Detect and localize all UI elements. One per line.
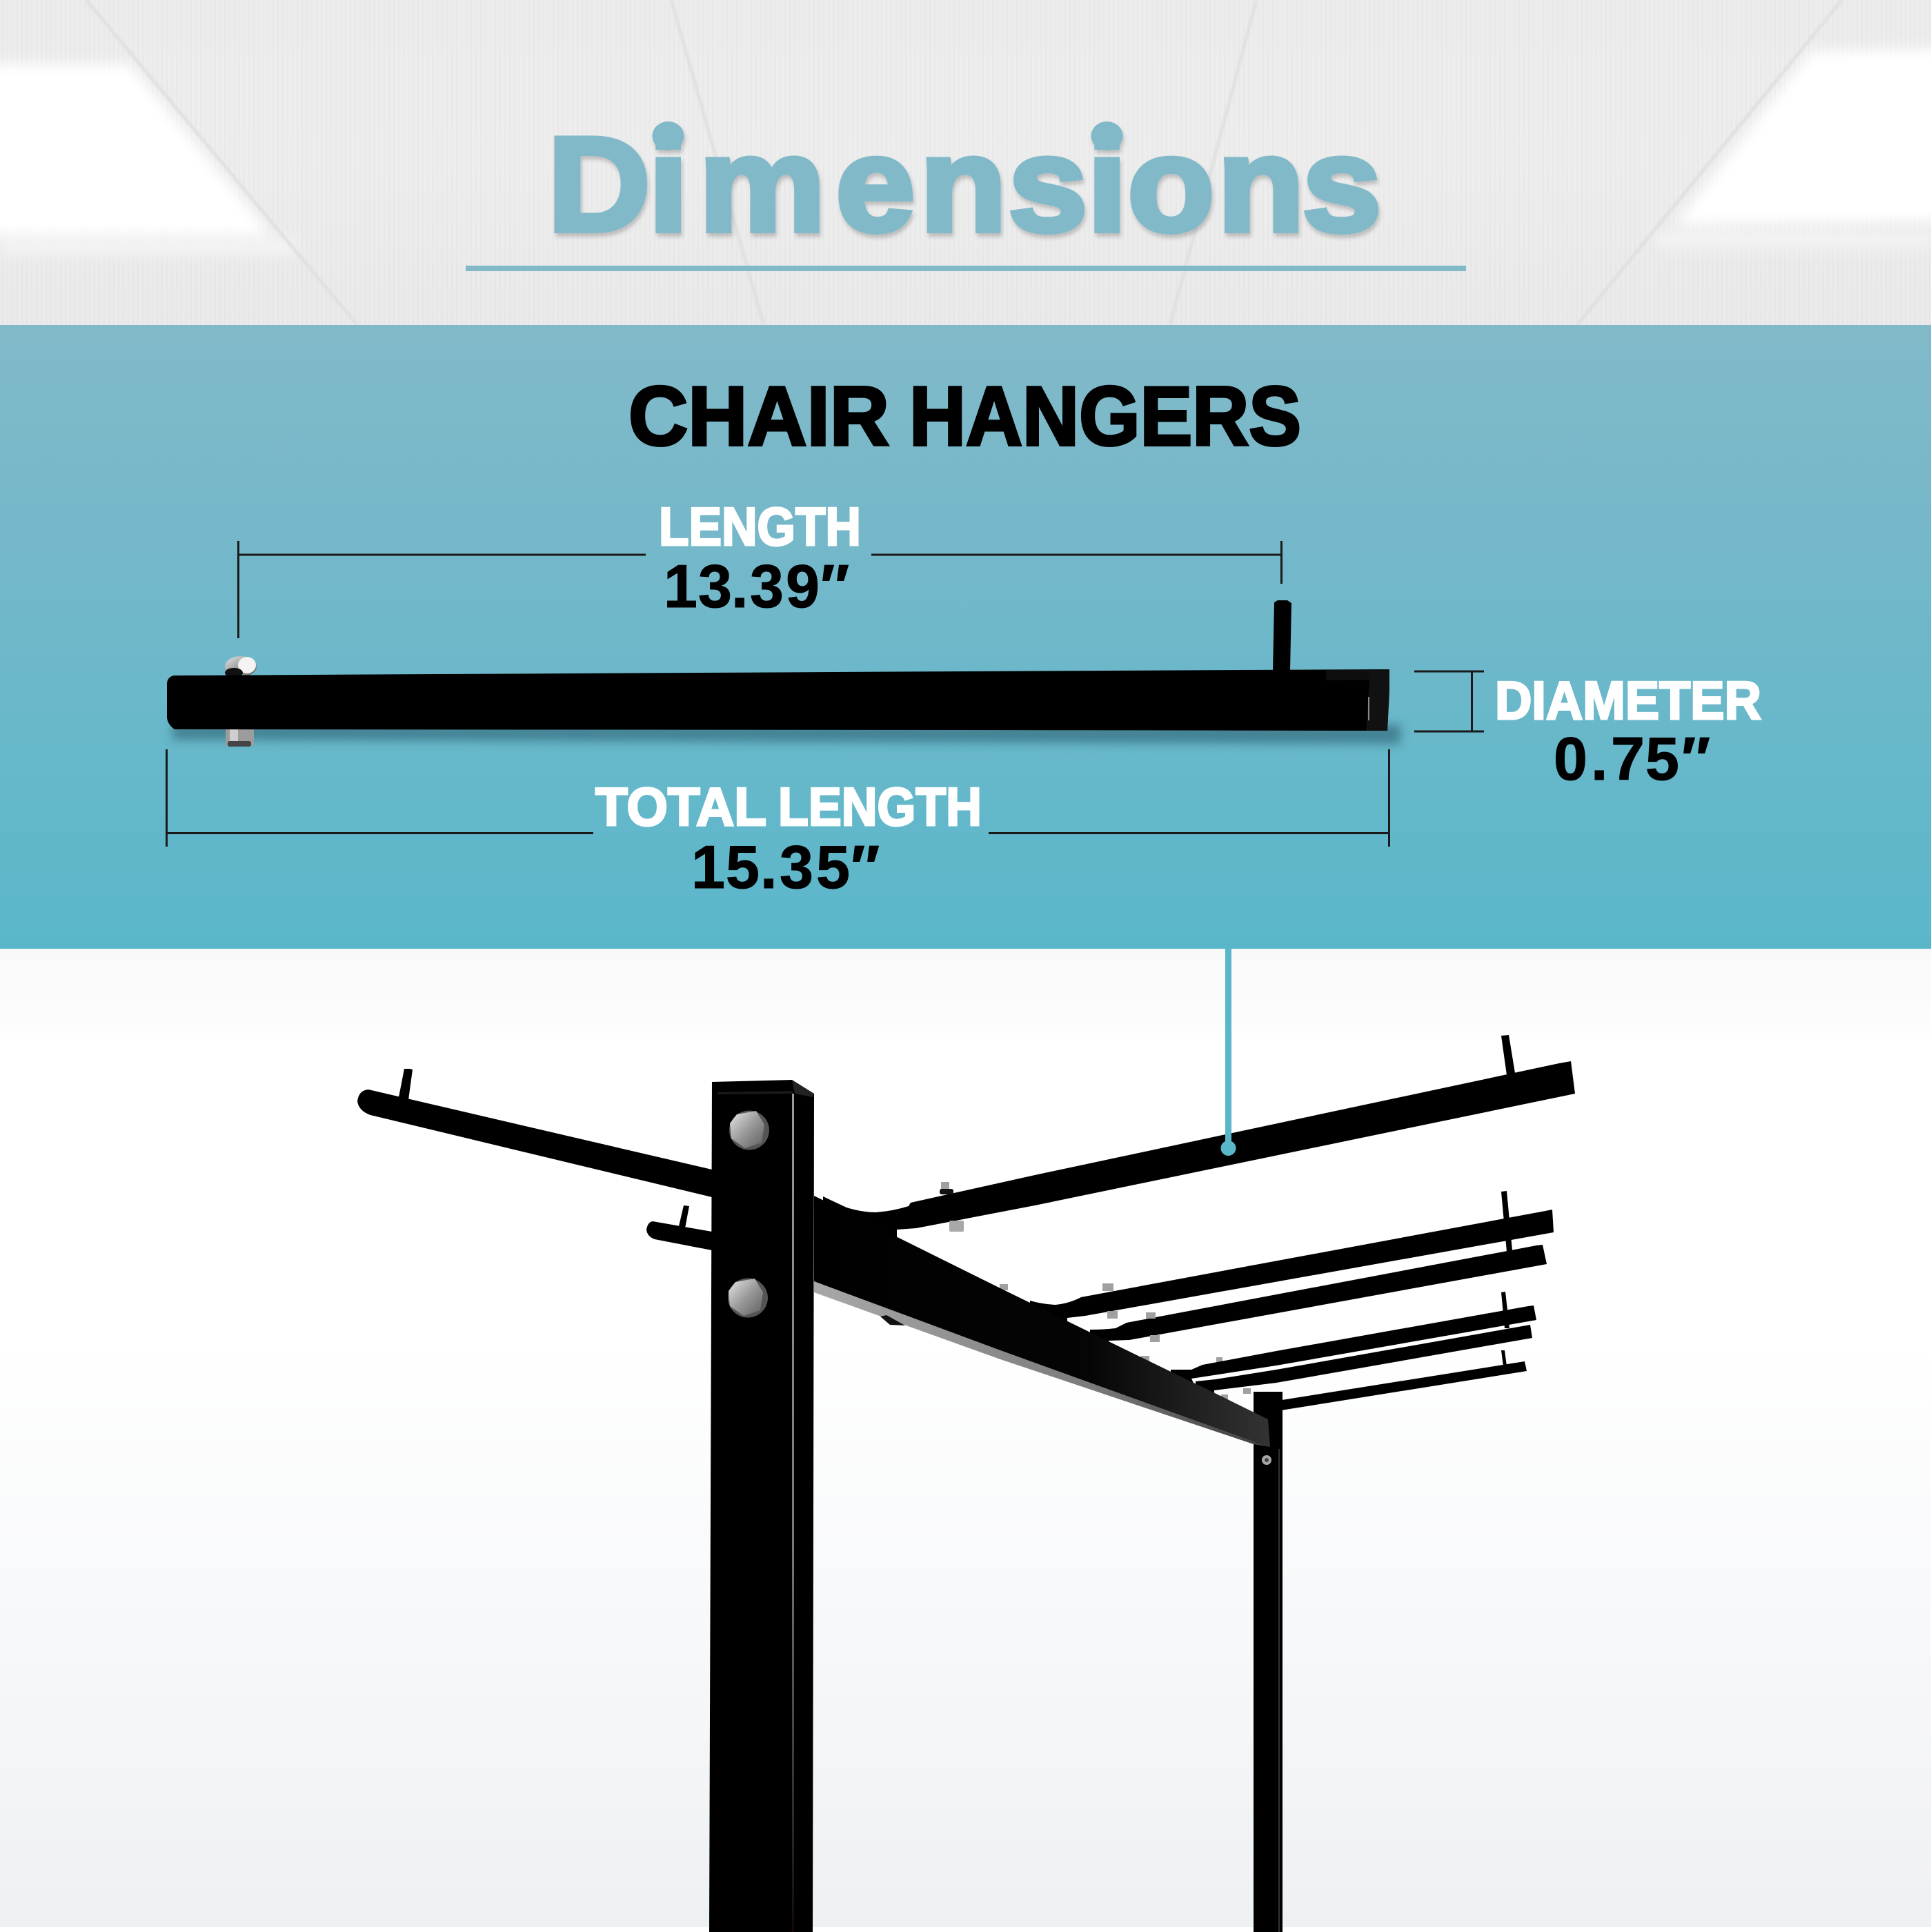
right post (1254, 1392, 1283, 1932)
diameter bracket (1414, 671, 1484, 733)
callout connector line with dot (1221, 949, 1236, 1156)
background: ceiling photo (0, 0, 1931, 325)
pair bolts (1000, 1283, 1251, 1399)
title underline (466, 266, 1466, 271)
top right hanger, callout target (823, 1035, 1575, 1242)
diagonal beam (814, 1196, 1270, 1447)
hanger bolts (940, 1182, 964, 1232)
main post (709, 1080, 814, 1932)
background: lower white floor gradient (0, 949, 1931, 1927)
title: Dimensions: Dimensions (548, 110, 1381, 259)
panel heading: CHAIR HANGERS (628, 369, 1301, 463)
label: LENGTH: LENGTH (659, 496, 861, 557)
panel: chair hangers band (0, 325, 1931, 949)
tube bolt top (225, 656, 257, 678)
chair hanger tube photo (167, 600, 1400, 747)
length dimension line (237, 541, 1283, 638)
third right hanger group (1171, 1292, 1536, 1413)
left arm, short (646, 1205, 712, 1250)
second right hanger pair (1000, 1191, 1554, 1399)
value: 13.39 inches: 13.39″ (664, 552, 849, 620)
label: TOTAL LENGTH (595, 776, 982, 837)
value: 15.35 inches: 15.35″ (691, 833, 880, 901)
label: DIAMETER: DIAMETER (1495, 670, 1761, 731)
panel heading: CHAIR HANGERS: CHAIR (628, 369, 889, 463)
rack photo: black garment-style chair rack (357, 1035, 1575, 1932)
total length dimension line (166, 749, 1390, 847)
bolt bottom (728, 1278, 768, 1318)
label: TOTAL LENGTH: LENGTH (778, 776, 982, 837)
bolt top (729, 1111, 769, 1150)
tube pin (1273, 600, 1291, 671)
left arm, long (357, 1069, 712, 1197)
tube bolt bottom (226, 724, 254, 747)
label: TOTAL LENGTH: TOTAL (595, 776, 766, 837)
panel heading: CHAIR HANGERS: HANGERS (909, 369, 1301, 463)
value: 0.75 inches: 0.75″ (1554, 724, 1710, 793)
